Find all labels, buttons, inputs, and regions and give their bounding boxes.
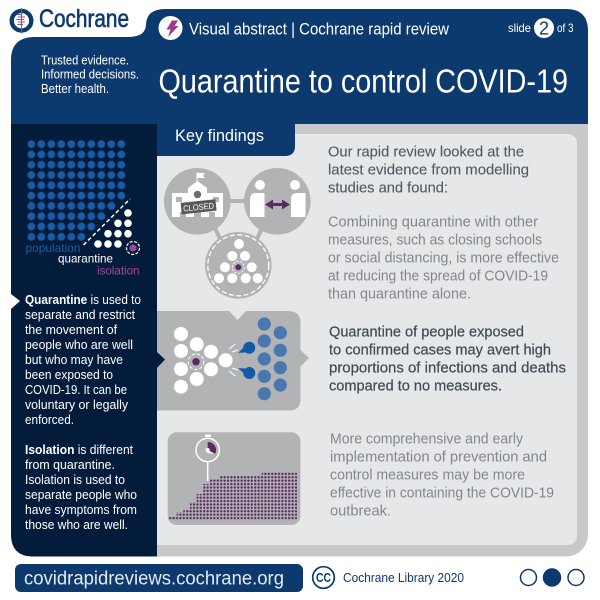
text: intro: latest evidence from modelling (328, 163, 529, 179)
text: intro: Our rapid review looked at the (328, 145, 524, 161)
text: finding three: More comprehensive and early (330, 431, 524, 447)
text: isolation definition: Isolation is used to (25, 472, 125, 487)
text: quarantine definition: COVID-19. It can be (25, 382, 127, 397)
footer: website link (15, 564, 303, 592)
panel: inner light content area (150, 134, 577, 545)
text: finding two: proportions of infections and deaths (329, 361, 566, 377)
chart: population dot grid: quarantine (58, 252, 113, 266)
panel: averted infections (157, 311, 309, 410)
text: finding one: or social distancing, is more effective (328, 251, 559, 267)
chart: population dot grid (26, 139, 140, 278)
slide counter (508, 18, 574, 38)
footer: website link: covidrapidreviews.cochrane.org (24, 568, 284, 590)
text: isolation definition: Isolation is different (25, 442, 133, 457)
text: finding two: compared to no measures. (329, 379, 502, 395)
slide counter: of 3 (557, 21, 574, 35)
text: quarantine definition: the movement of (25, 322, 117, 337)
text: finding one: measures, such as closing schools (328, 233, 542, 249)
slide progress dots (520, 569, 584, 586)
text: finding three: control measures may be more (330, 467, 525, 483)
text: finding one: than quarantine alone. (328, 287, 471, 303)
arrow: sidebar pointer (11, 294, 20, 309)
tagline (41, 54, 139, 96)
icon: closed school (164, 168, 231, 235)
tagline: Informed decisions. (41, 68, 139, 82)
text: finding two: Quarantine of people exposed (329, 325, 524, 341)
heading: visual abstract label: Visual abstract | Cochrane rapid review (189, 20, 450, 38)
text: finding three: implementation of prevention and (330, 449, 547, 465)
slide counter: 2 (539, 18, 549, 38)
text: finding three: outbreak. (330, 503, 391, 519)
slide counter: slide (508, 21, 531, 35)
icon: creative commons: CC (316, 571, 331, 585)
text: finding three (330, 431, 554, 519)
text: quarantine definition (25, 292, 141, 427)
chart: population dot grid: isolation (97, 264, 140, 278)
tagline: Trusted evidence. (41, 54, 129, 68)
text: quarantine definition: Quarantine is used to (25, 292, 141, 307)
text: finding one: Combining quarantine with other (328, 215, 538, 231)
diagram: combined measures circles (164, 168, 311, 299)
text: finding two (329, 325, 566, 395)
icon: closed school: CLOSED (183, 200, 215, 214)
text: quarantine definition: enforced. (25, 412, 74, 427)
text: intro (328, 145, 529, 197)
footer: copyright text: Cochrane Library 2020 (343, 571, 464, 585)
icon: lightning bolt badge (158, 16, 182, 40)
text: intro: studies and found: (328, 181, 448, 197)
text: isolation definition (25, 442, 137, 532)
icon: quarantine cluster (205, 232, 272, 299)
icon: social distancing (244, 168, 311, 235)
text: quarantine definition: been exposed to (25, 367, 113, 382)
text: quarantine definition: people who are well (25, 337, 133, 352)
logo: Cochrane: Cochrane (39, 5, 129, 33)
text: isolation definition: those who are well. (25, 517, 128, 532)
text: quarantine definition: but who may have (25, 352, 123, 367)
text: quarantine definition: separate and restrict (25, 307, 135, 322)
tab: key findings (157, 124, 295, 156)
text: quarantine definition: voluntary or legally (25, 397, 128, 412)
text: finding three: effective in containing the COVID-19 (330, 485, 554, 501)
text: isolation definition: from quarantine. (25, 457, 115, 472)
text: finding one: at reducing the spread of COVID-19 (328, 269, 548, 285)
panel: header band (11, 9, 588, 124)
chart: population dot grid: population (26, 241, 80, 255)
icon: creative commons (313, 567, 334, 588)
panel: early implementation chart (168, 432, 300, 525)
text: finding two: to confirmed cases may avert high (329, 343, 551, 359)
logo: Cochrane (12, 5, 129, 34)
text: isolation definition: separate people who (25, 487, 137, 502)
tab: key findings: Key findings (175, 126, 264, 145)
text: isolation definition: have symptoms from (25, 502, 137, 517)
text: finding one (328, 215, 559, 303)
panel: outer grey frame (11, 100, 588, 556)
tagline: Better health. (41, 82, 109, 96)
panel: definitions sidebar (11, 124, 157, 556)
